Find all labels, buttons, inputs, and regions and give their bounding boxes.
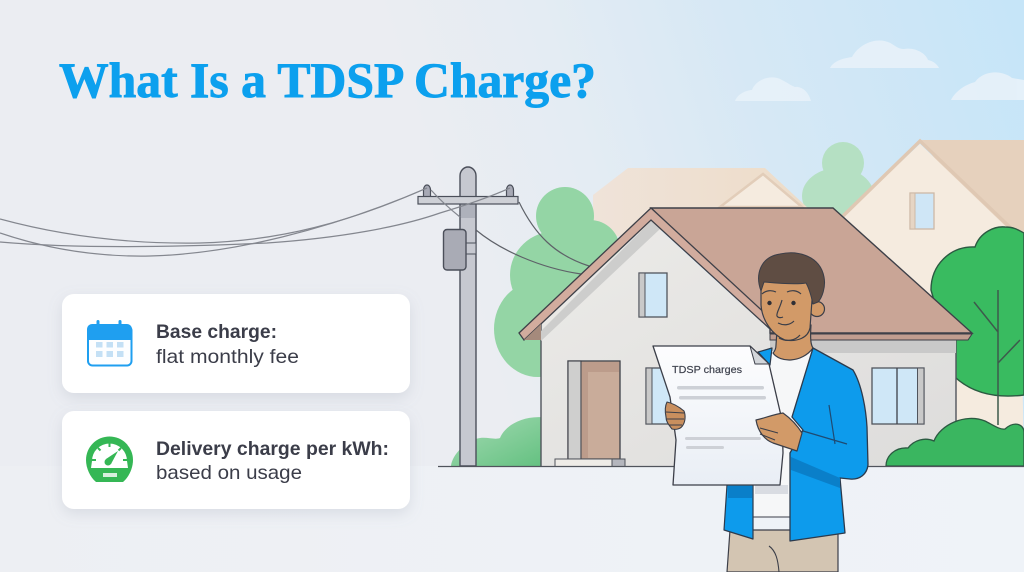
- clouds: [735, 40, 1024, 101]
- roof shadow: [541, 221, 660, 341]
- paper fold: [750, 346, 769, 364]
- bracket: [466, 243, 476, 254]
- ground: [0, 466, 1024, 572]
- right green tree: [931, 227, 1024, 425]
- right hand: [756, 413, 802, 451]
- window on right house: [910, 193, 934, 229]
- door: [555, 361, 625, 466]
- background tree behind right house: [802, 142, 874, 224]
- cardigan left: [724, 485, 753, 539]
- transformer box: [444, 230, 466, 270]
- house wall: [541, 222, 956, 466]
- title: What Is a TDSP Charge?: [59, 52, 596, 108]
- small bush by pole: [451, 417, 548, 466]
- power lines: [0, 188, 589, 274]
- light green tree behind house: [494, 187, 620, 377]
- card: base charge: [62, 294, 410, 393]
- left hand: [665, 402, 685, 429]
- delivery charge label: Delivery charge per kWh:: [156, 438, 389, 460]
- paper heading: TDSP charges: [672, 364, 742, 376]
- head: [759, 253, 825, 340]
- ground line: [438, 466, 1024, 468]
- gable trim: [519, 208, 770, 340]
- cardigan right: [790, 348, 868, 541]
- right lower window: [872, 368, 924, 424]
- ear: [810, 302, 824, 316]
- delivery charge description: based on usage: [156, 462, 302, 484]
- background house left: [593, 168, 810, 240]
- base charge label: Base charge:: [156, 321, 277, 343]
- eyes and brows: [767, 301, 772, 305]
- shirt: [753, 350, 813, 517]
- insulators: [424, 185, 430, 197]
- upper window: [639, 273, 667, 317]
- paper: [653, 346, 783, 485]
- paper text lines: [677, 386, 766, 449]
- background house right: [843, 140, 1024, 466]
- roof surface: [651, 208, 972, 333]
- utility pole: [418, 167, 518, 466]
- crossarm: [418, 196, 518, 204]
- base charge description: flat monthly fee: [156, 346, 299, 368]
- front right bush: [886, 418, 1024, 466]
- person: [653, 253, 868, 572]
- trunk and branches: [974, 290, 1020, 425]
- icon: calendar: [87, 320, 132, 366]
- pole shaft: [460, 167, 476, 466]
- left lower window: [646, 368, 676, 424]
- pants: [727, 530, 838, 572]
- icon: gauge: [86, 436, 133, 482]
- face: [761, 270, 812, 340]
- main house: [519, 208, 972, 466]
- roof eave: [770, 334, 972, 340]
- tree crown: [931, 227, 1024, 396]
- neck: [773, 325, 813, 360]
- hair: [759, 253, 825, 304]
- card: delivery charge: [62, 411, 410, 509]
